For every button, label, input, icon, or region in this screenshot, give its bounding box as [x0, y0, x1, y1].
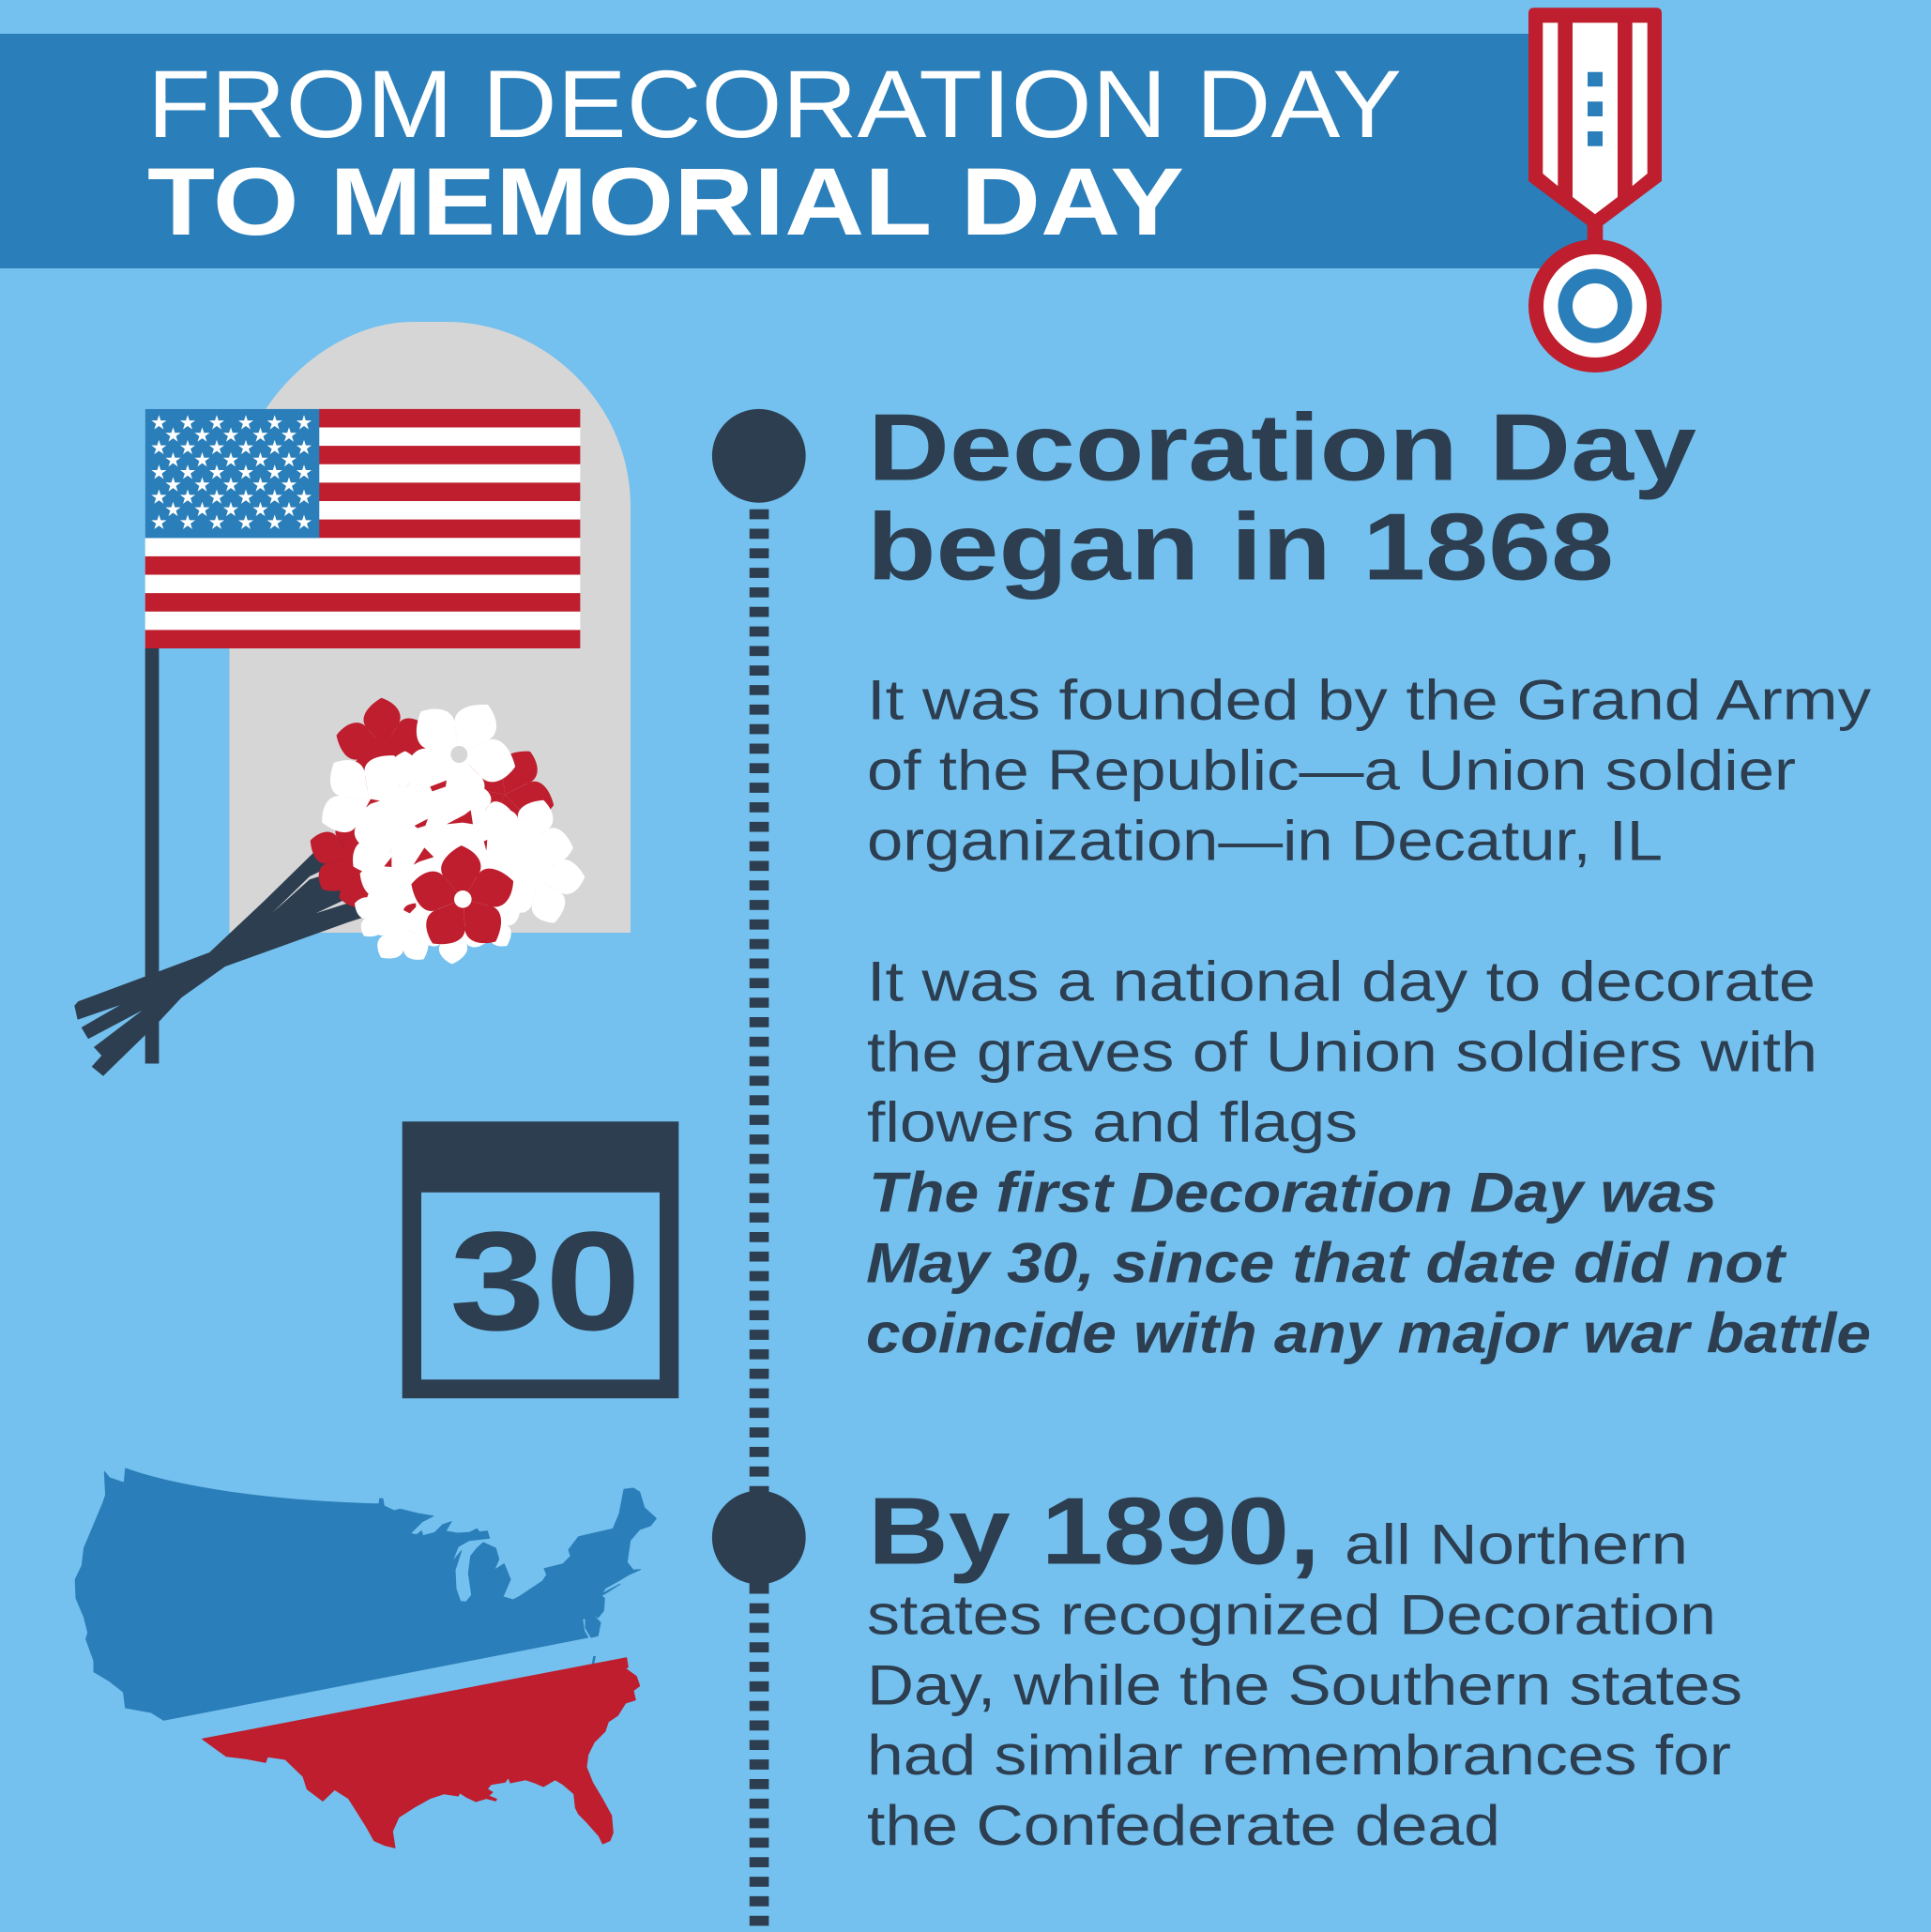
text: By 1890: all Northern: [1345, 1514, 1688, 1576]
text: founding: organization—in Decatur, IL: [867, 810, 1663, 873]
icon: flower stems: [74, 835, 371, 1076]
text: first Decoration Day callout: [866, 1162, 1871, 1365]
icon: bouquet of flowers: [294, 675, 598, 981]
title: FROM DECORATION DAY: [147, 51, 1402, 158]
text: first Decoration Day callout: The first Decoration Day was: [869, 1162, 1717, 1225]
text: By 1890: the Confederate dead: [867, 1794, 1500, 1857]
icon: flag pole: [145, 648, 159, 1064]
timeline marker: 1868: [712, 409, 806, 503]
icon: American flag: [145, 409, 580, 648]
icon: gravestone: [229, 322, 631, 933]
text: first Decoration Day callout: coincide with any major war battle: [866, 1302, 1871, 1365]
text: national day: [867, 951, 1817, 1154]
heading: Decoration Day began in 1868: began in 1868: [867, 494, 1614, 600]
heading: Decoration Day began in 1868: [867, 396, 1696, 600]
text: founding: It was founded by the Grand Army: [867, 669, 1871, 732]
timeline marker: 1890: [712, 1486, 806, 1593]
title: TO MEMORIAL DAY: [147, 148, 1184, 255]
text: By 1890: states recognized Decoration: [867, 1584, 1716, 1646]
text: By 1890: had similar remembrances for: [867, 1724, 1731, 1787]
text: founding: of the Republic—a Union soldier: [867, 739, 1796, 802]
map: southern states: [203, 1658, 640, 1848]
text: By 1890: By 1890,: [868, 1480, 1320, 1585]
text: founding: [867, 669, 1871, 873]
title banner: [0, 34, 1588, 268]
text: national day: flowers and flags: [867, 1091, 1358, 1154]
icon: medal: [1528, 8, 1662, 373]
text: first Decoration Day callout: May 30, since that date did not: [866, 1232, 1787, 1295]
title: [147, 51, 1402, 255]
map: northern states: [75, 1468, 656, 1720]
heading: Decoration Day began in 1868: Decoration Day: [868, 396, 1696, 501]
text: By 1890: Day, while the Southern states: [867, 1653, 1742, 1717]
text: national day: It was a national day to decorate: [867, 951, 1816, 1013]
timeline dashed line: [750, 510, 768, 1925]
icon: calendar: [403, 1121, 678, 1398]
text: By 1890: [867, 1480, 1742, 1857]
text: national day: the graves of Union soldiers with: [867, 1021, 1817, 1084]
icon: calendar: 30: [449, 1202, 641, 1360]
